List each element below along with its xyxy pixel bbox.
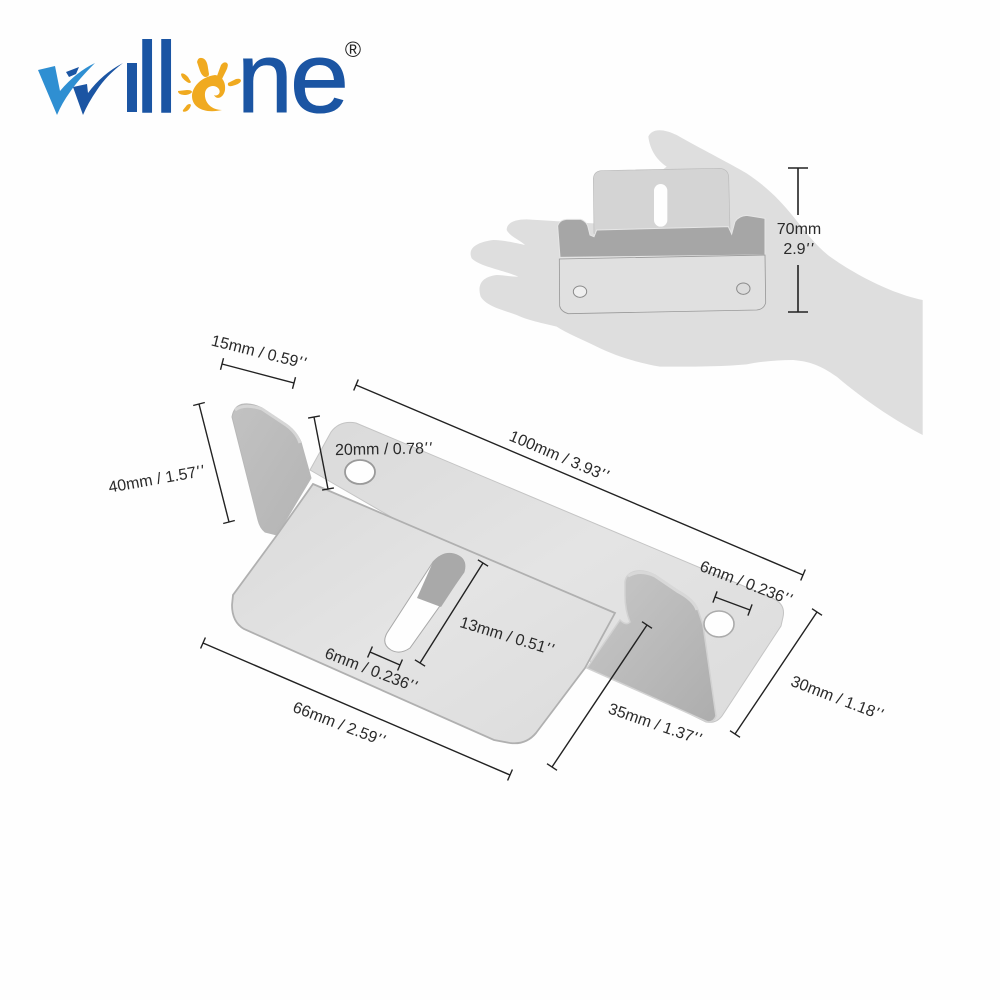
small bracket [558, 168, 766, 314]
label 2.9 inch: 2.9'' [783, 241, 815, 258]
logo icon: sun [178, 58, 241, 112]
logo letters ll: ll [136, 22, 174, 134]
logo letter n: n [237, 22, 293, 134]
dimension: 30mm [730, 609, 886, 737]
logo: Willone [38, 22, 361, 134]
left tab [232, 404, 311, 535]
label 40mm: 40mm / 1.57'' [107, 463, 207, 497]
small bracket left hole [573, 286, 587, 297]
label 35mm: 35mm / 1.37'' [606, 701, 704, 749]
logo letter i [127, 63, 137, 112]
back plate [310, 422, 784, 722]
left hole [345, 460, 375, 484]
right tab [587, 571, 716, 722]
dimension: 40mm [107, 402, 235, 524]
label 13mm: 13mm / 0.51'' [458, 614, 556, 659]
logo icon: double check W [38, 63, 123, 115]
label 15mm: 15mm / 0.59'' [209, 333, 309, 373]
front plate [232, 484, 615, 743]
dimension: 15mm [209, 333, 309, 389]
small bracket dark fold [558, 215, 765, 257]
slot opening [385, 553, 465, 652]
label 30mm: 30mm / 1.18'' [788, 673, 886, 724]
main bracket [232, 404, 784, 743]
registered mark: ® [345, 37, 361, 62]
dimension: 6mm slot [322, 645, 420, 696]
dimension: 70mm height [777, 168, 821, 312]
label 6mm hole: 6mm / 0.236'' [697, 558, 795, 609]
dimension: 66mm [201, 638, 512, 780]
dimension: 20mm [308, 416, 433, 490]
small bracket upper plate [593, 168, 730, 233]
hand silhouette [471, 130, 923, 435]
label 66mm: 66mm / 2.59'' [290, 699, 388, 750]
slot back plate visible through [417, 553, 465, 607]
small bracket right hole [737, 283, 750, 294]
label 20mm: 20mm / 0.78'' [335, 440, 433, 459]
dimension: 6mm hole [697, 558, 795, 616]
small bracket slot [654, 184, 667, 227]
dimension: 35mm [547, 622, 704, 770]
logo letter e: e [290, 22, 349, 133]
dimension: 13mm [415, 560, 556, 666]
hand silhouette with small bracket [471, 130, 923, 435]
right tab rim [628, 572, 697, 610]
label 70mm: 70mm [777, 221, 821, 238]
dimension: 100mm [354, 380, 805, 580]
label 6mm slot: 6mm / 0.236'' [322, 645, 420, 696]
right hole [704, 611, 734, 637]
left tab rim [235, 406, 300, 443]
small bracket lower plate [559, 255, 766, 314]
label 100mm: 100mm / 3.93'' [507, 428, 612, 485]
